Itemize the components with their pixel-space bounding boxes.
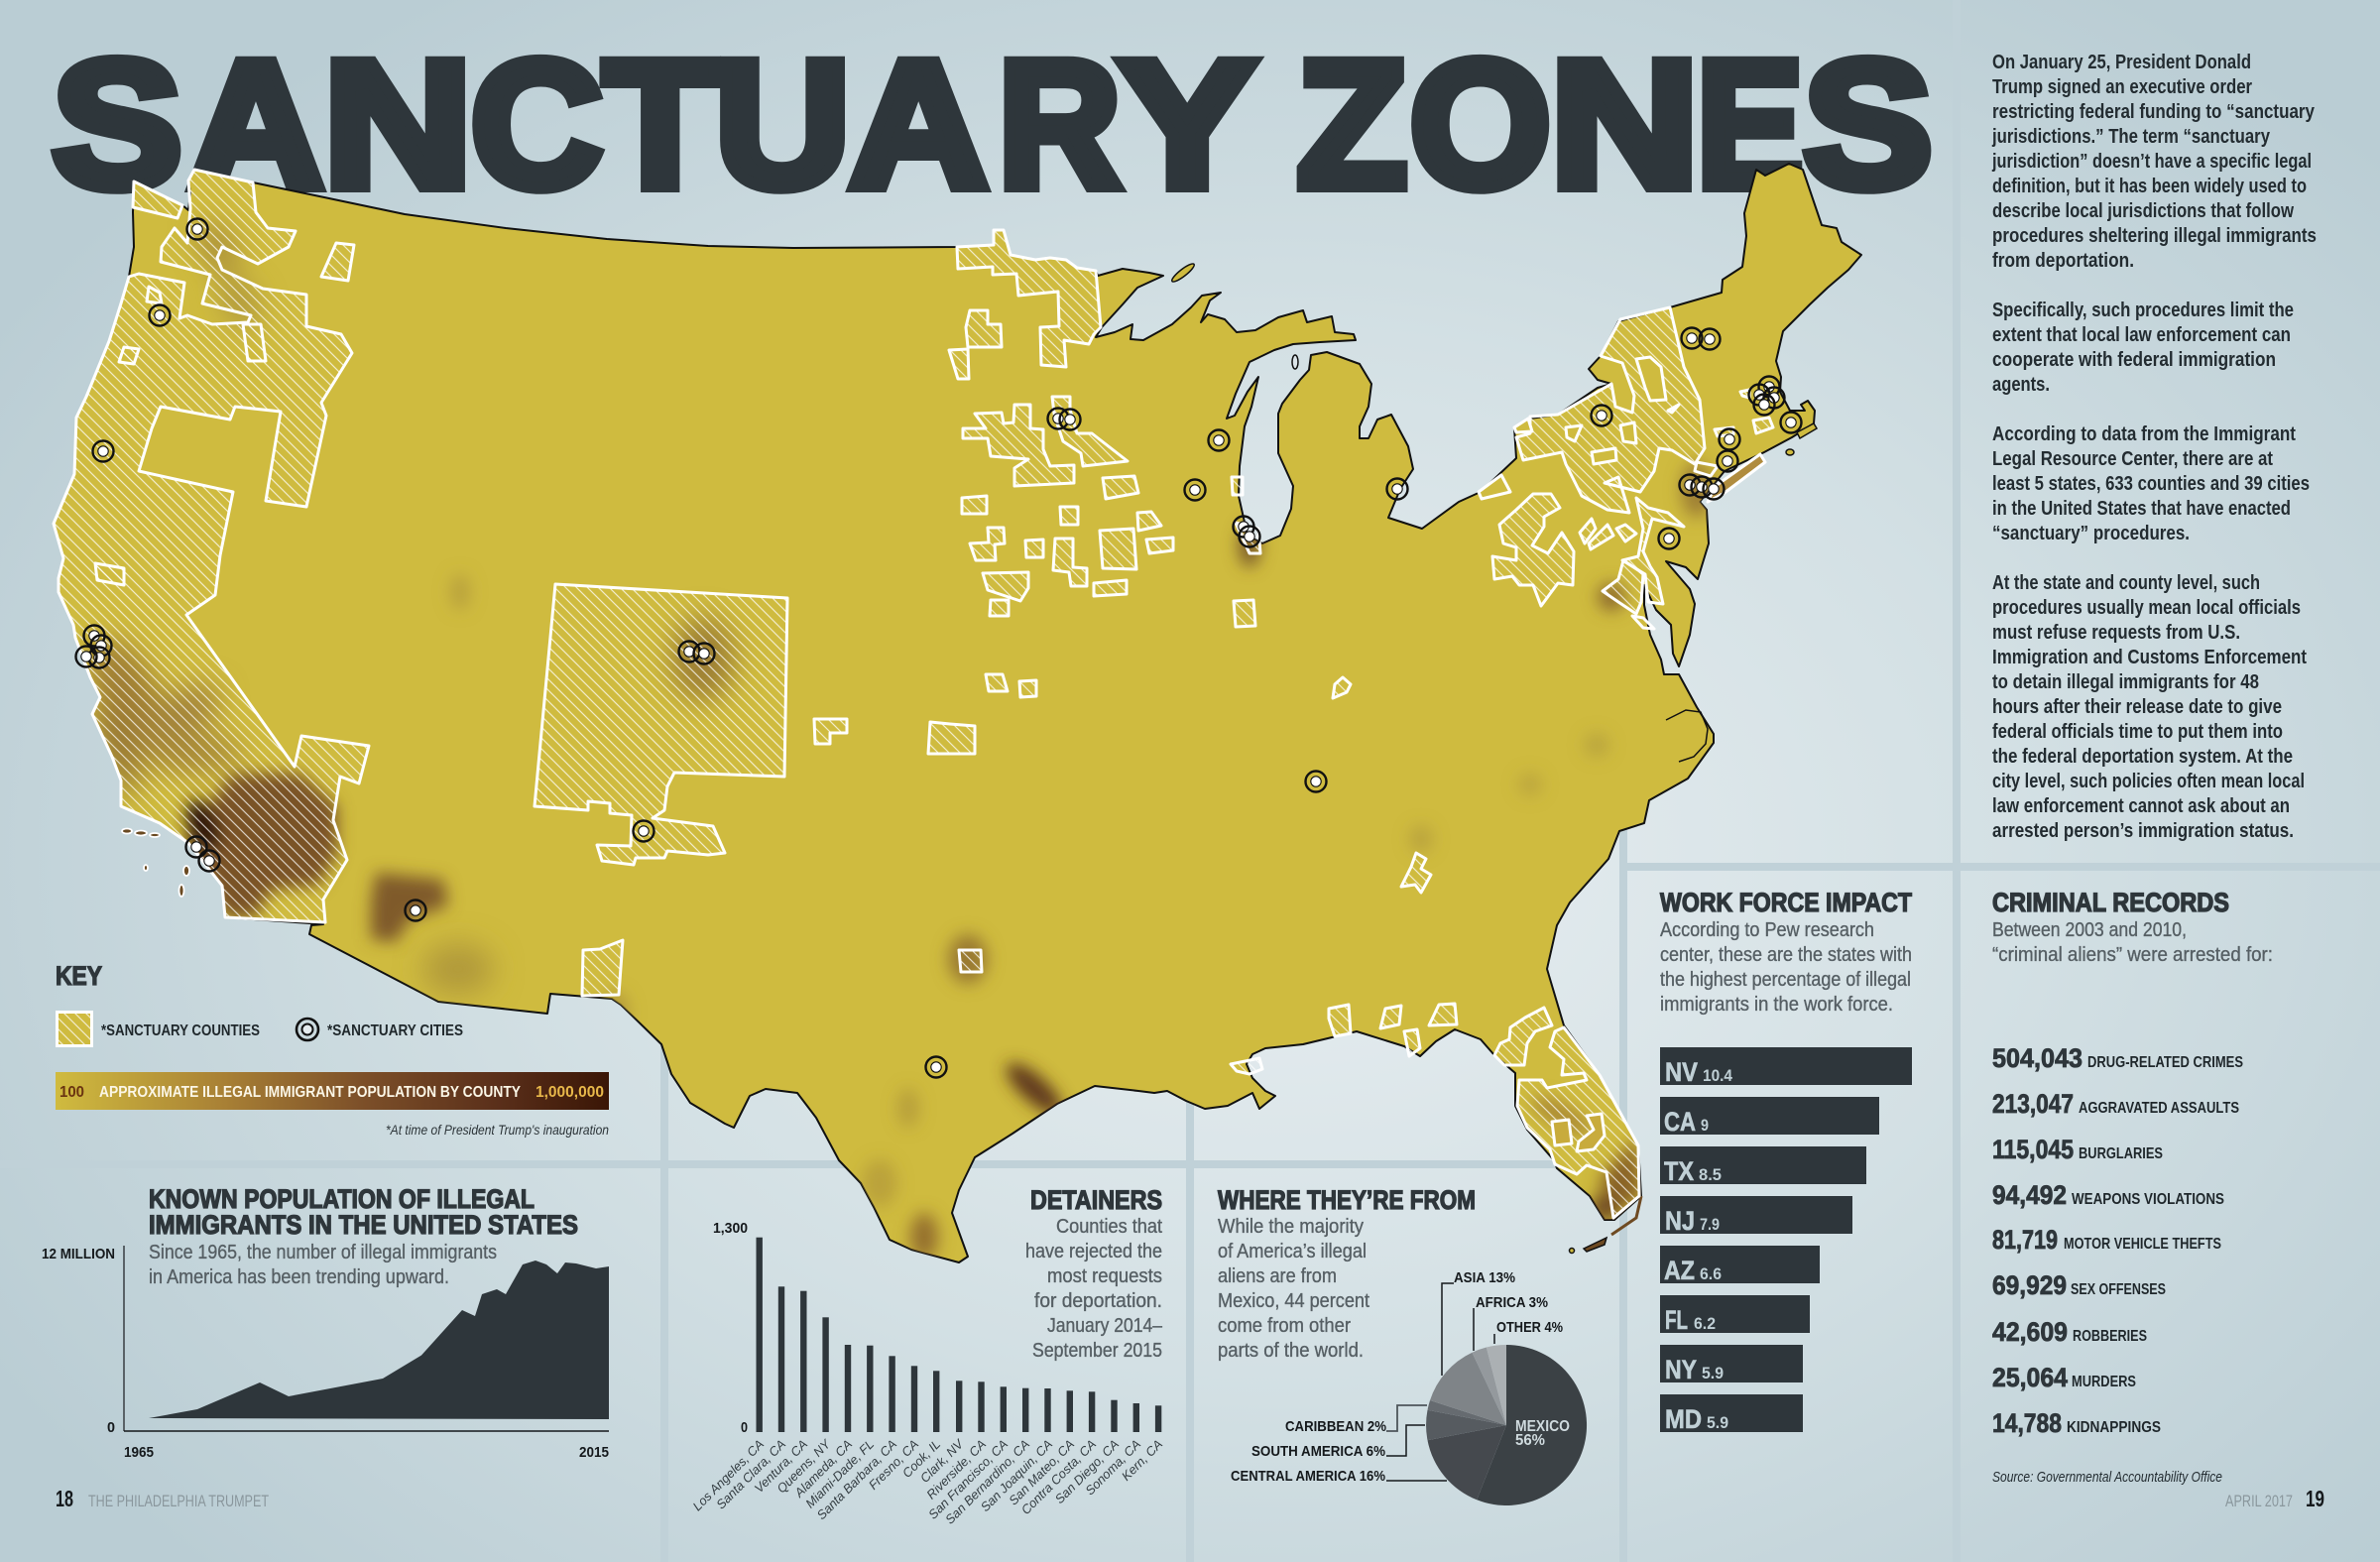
article text column: must refuse requests from U.S. [1992, 622, 2240, 644]
arrest statistics [1992, 1043, 2243, 1438]
population heat layer [74, 214, 1713, 1261]
article text column: restricting federal funding to “sanctuary [1992, 101, 2316, 123]
label: sanctuary counties: *SANCTUARY COUNTIES [101, 1022, 260, 1039]
title: C [471, 23, 603, 225]
intro text: Between 2003 and 2010, [1992, 919, 2187, 941]
bar chart: Miami-Dade, FL [802, 1437, 877, 1510]
arrest statistics: MOTOR VEHICLE THEFTS [2064, 1236, 2221, 1253]
intro text: parts of the world. [1218, 1340, 1364, 1362]
article text column: describe local jurisdictions that follow [1992, 200, 2294, 222]
bar chart: Santa Clara, CA [713, 1437, 788, 1512]
intro text: aliens are from [1218, 1265, 1337, 1287]
land mass [54, 164, 1861, 1262]
horizontal bar chart: 5.9 [1702, 1364, 1724, 1382]
article text column: law enforcement cannot ask about an [1992, 795, 2290, 817]
arrest statistics: 504,043 [1992, 1043, 2082, 1073]
article text column: agents. [1992, 374, 2050, 396]
article text column: to detain illegal immigrants for 48 [1992, 671, 2259, 693]
population gradient legend: 1,000,000 [536, 1084, 604, 1101]
article text column: “sanctuary” procedures. [1992, 523, 2190, 544]
pie chart [1231, 1269, 1587, 1505]
article text column: At the state and county level, such [1992, 572, 2260, 594]
intro text: center, these are the states with [1660, 944, 1912, 966]
intro text: While the majority [1218, 1216, 1364, 1238]
article text column: On January 25, President Donald [1992, 52, 2251, 73]
horizontal bar chart: 5.9 [1707, 1413, 1728, 1432]
panel: known population [42, 1184, 609, 1461]
article text column: procedures usually mean local officials [1992, 597, 2301, 619]
article text column: least 5 states, 633 counties and 39 cities [1992, 473, 2310, 495]
arrest statistics: 81,719 [1992, 1225, 2058, 1255]
bar chart: Cook, IL [899, 1437, 943, 1481]
horizontal bar chart: NV [1665, 1057, 1698, 1087]
article text column: definition, but it has been widely used to [1992, 176, 2307, 197]
sanctuary counties: west coast [54, 170, 369, 922]
intro text [1992, 919, 2273, 966]
area chart: 0 [107, 1419, 115, 1436]
article text column: cooperate with federal immigration [1992, 349, 2276, 371]
article text column: the federal deportation system. At the [1992, 746, 2293, 768]
article text column: arrested person’s immigration status. [1992, 820, 2294, 842]
intro text: come from other [1218, 1315, 1351, 1337]
arrest statistics: 94,492 [1992, 1180, 2067, 1210]
intro text: have rejected the [1025, 1241, 1162, 1262]
title: T [603, 23, 717, 225]
arrest statistics: KIDNAPPINGS [2067, 1419, 2161, 1436]
article text column: According to data from the Immigrant [1992, 423, 2296, 445]
panel: where they're from [1218, 1185, 1587, 1505]
bar chart: San Diego, CA [1052, 1437, 1122, 1506]
horizontal bar chart: FL [1665, 1305, 1688, 1335]
horizontal bar chart: NY [1665, 1355, 1697, 1384]
horizontal bar chart: CA [1664, 1107, 1696, 1137]
bar chart: Contra Costa, CA [1018, 1437, 1099, 1517]
intro text: January 2014– [1047, 1315, 1163, 1337]
horizontal bar chart: 7.9 [1700, 1215, 1720, 1234]
bar chart: Alameda, CA [790, 1437, 855, 1501]
article text column: jurisdictions.” The term “sanctuary [1991, 126, 2271, 148]
title: U [715, 23, 850, 225]
pie chart: AFRICA 3% [1476, 1294, 1548, 1311]
folio right: APRIL 2017 [2225, 1492, 2293, 1510]
bar chart: Riverside, CA [923, 1437, 989, 1502]
intro text: for deportation. [1034, 1290, 1162, 1312]
bar chart: Los Angeles, CA [689, 1437, 767, 1513]
article text column: hours after their release date to give [1992, 696, 2282, 718]
title: N [1550, 23, 1699, 225]
map of the United States [54, 164, 1861, 1262]
article text column: in the United States that have enacted [1992, 498, 2291, 520]
title: A [849, 23, 988, 225]
heading: IMMIGRANTS IN THE UNITED STATES [149, 1210, 578, 1240]
horizontal bar chart: 10.4 [1703, 1066, 1732, 1085]
arrest statistics: ROBBERIES [2073, 1328, 2147, 1345]
pie chart: 56% [1515, 1432, 1545, 1449]
bar chart: San Francisco, CA [925, 1437, 1011, 1522]
arrest statistics: 69,929 [1992, 1270, 2067, 1300]
bar chart: San Mateo, CA [1006, 1437, 1077, 1507]
sanctuary counties: southwest and plains [535, 584, 982, 996]
intro text: Counties that [1056, 1216, 1162, 1238]
label: sanctuary cities: *SANCTUARY CITIES [327, 1022, 463, 1039]
bar chart [689, 1220, 1165, 1527]
title: R [999, 23, 1121, 225]
swatch: sanctuary counties [58, 1012, 91, 1045]
key heading: KEY [56, 961, 102, 991]
pie chart: CARIBBEAN 2% [1285, 1418, 1386, 1435]
area chart: 2015 [579, 1444, 609, 1461]
bar chart: 1,300 [713, 1220, 748, 1237]
arrest statistics: 14,788 [1992, 1408, 2062, 1438]
heading [149, 1184, 578, 1240]
intro text: of America’s illegal [1218, 1241, 1367, 1262]
article text column: jurisdiction” doesn’t have a specific legal [1991, 151, 2312, 173]
sanctuary counties: gulf and florida [1231, 1004, 1639, 1218]
article text column: Immigration and Customs Enforcement [1992, 647, 2307, 668]
heading: CRIMINAL RECORDS [1992, 888, 2229, 917]
bar chart: Kern, CA [1119, 1437, 1165, 1484]
sanctuary counties: upper midwest [949, 230, 1431, 893]
arrest statistics: DRUG-RELATED CRIMES [2087, 1054, 2243, 1071]
article text column [1991, 52, 2317, 842]
bar chart: Ventura, CA [752, 1437, 810, 1496]
pie chart: ASIA 13% [1454, 1269, 1515, 1286]
article text column: city level, such policies often mean local [1992, 771, 2305, 792]
panel: work force impact [1660, 888, 1912, 1434]
arrest statistics: 42,609 [1992, 1317, 2068, 1347]
horizontal bar chart [1660, 1047, 1912, 1434]
article text column: Legal Resource Center, there are at [1992, 448, 2273, 470]
horizontal bar chart: TX [1664, 1156, 1694, 1186]
sanctuary counties: northeast [1479, 307, 1773, 629]
population gradient legend: APPROXIMATE ILLEGAL IMMIGRANT POPULATION BY COUNTY [99, 1084, 521, 1101]
intro text: “criminal aliens” were arrested for: [1992, 944, 2273, 966]
intro text: Since 1965, the number of illegal immigrants [149, 1242, 497, 1263]
area chart: 1965 [124, 1444, 154, 1461]
article text column: Trump signed an executive order [1992, 76, 2252, 98]
intro text [1218, 1216, 1369, 1362]
heading: WHERE THEY’RE FROM [1218, 1185, 1476, 1215]
pie chart: SOUTH AMERICA 6% [1251, 1443, 1385, 1460]
title: A [188, 23, 323, 225]
icon: sanctuary city [297, 1019, 318, 1040]
arrest statistics: MURDERS [2072, 1374, 2136, 1390]
key [56, 961, 609, 1138]
islands and water details [1170, 262, 1817, 1254]
horizontal bar chart: 6.6 [1700, 1264, 1722, 1283]
intro text: immigrants in the work force. [1660, 994, 1893, 1016]
long island [1708, 454, 1765, 502]
intro text [1660, 919, 1912, 1016]
bar chart: Fresno, CA [866, 1437, 921, 1493]
arrest statistics: 213,047 [1992, 1089, 2074, 1119]
intro text: According to Pew research [1660, 919, 1874, 941]
population gradient legend: 100 [60, 1084, 84, 1101]
article text column: procedures sheltering illegal immigrants [1992, 225, 2317, 247]
bar chart: Clark, NV [917, 1435, 967, 1486]
horizontal bar chart: MD [1665, 1404, 1702, 1434]
folio right [2225, 1486, 2324, 1511]
sanctuary cities [75, 218, 1801, 1077]
intro text: Mexico, 44 percent [1218, 1290, 1369, 1312]
folio left [56, 1486, 269, 1511]
bar chart: Sonoma, CA [1082, 1437, 1143, 1498]
article text column: from deportation. [1992, 250, 2134, 272]
article text column: federal officials time to put them into [1992, 721, 2283, 743]
bar chart: Santa Barbara, CA [814, 1437, 899, 1522]
arrest statistics: SEX OFFENSES [2071, 1281, 2166, 1298]
key footnote: *At time of President Trump's inauguration [386, 1122, 609, 1138]
article text column: extent that local law enforcement can [1992, 324, 2291, 346]
pie chart: MEXICO [1515, 1418, 1570, 1435]
bar chart: 0 [741, 1419, 748, 1436]
horizontal bar chart: 8.5 [1699, 1165, 1722, 1184]
title: Z [1297, 23, 1407, 225]
horizontal bar chart: 9 [1701, 1116, 1709, 1135]
area chart: 12 MILLION [42, 1246, 115, 1262]
title: S [53, 23, 182, 225]
panel: criminal records [1992, 888, 2273, 1486]
folio left: THE PHILADELPHIA TRUMPET [88, 1492, 269, 1510]
intro text: September 2015 [1032, 1340, 1162, 1362]
california islands [122, 829, 189, 897]
pie chart: OTHER 4% [1496, 1319, 1563, 1336]
pie chart: CENTRAL AMERICA 16% [1231, 1468, 1385, 1485]
arrest statistics: 25,064 [1992, 1363, 2068, 1392]
arrest statistics: WEAPONS VIOLATIONS [2072, 1191, 2224, 1208]
arrest statistics: AGGRAVATED ASSAULTS [2079, 1100, 2239, 1117]
title: O [1410, 23, 1551, 225]
panel: detainers [689, 1185, 1165, 1527]
intro text: most requests [1047, 1265, 1162, 1287]
intro text: in America has been trending upward. [149, 1266, 449, 1288]
horizontal bar chart: NJ [1665, 1206, 1695, 1236]
title: S [1804, 23, 1933, 225]
horizontal bar chart: AZ [1664, 1256, 1695, 1285]
horizontal bar chart: 6.2 [1694, 1314, 1716, 1333]
population gradient legend [56, 1072, 609, 1110]
area chart [42, 1246, 609, 1461]
folio left: 18 [56, 1486, 73, 1511]
folio right: 19 [2306, 1486, 2324, 1511]
source note: Source: Governmental Accountability Office [1992, 1470, 2222, 1486]
heading: DETAINERS [1030, 1185, 1162, 1215]
bar chart: San Bernardino, CA [942, 1437, 1032, 1527]
intro text: the highest percentage of illegal [1660, 969, 1911, 991]
heading: WORK FORCE IMPACT [1660, 888, 1912, 917]
heading: KNOWN POPULATION OF ILLEGAL [149, 1184, 535, 1214]
intro text [149, 1242, 497, 1288]
arrest statistics: BURGLARIES [2079, 1145, 2163, 1162]
arrest statistics: 115,045 [1992, 1135, 2074, 1164]
bar chart: San Joaquin, CA [978, 1437, 1055, 1514]
bar chart: Queens, NY [774, 1435, 834, 1496]
title: E [1697, 23, 1803, 225]
title: Y [1119, 23, 1256, 225]
intro text [1025, 1216, 1163, 1362]
article text column: Specifically, such procedures limit the [1992, 300, 2294, 321]
title: N [323, 23, 472, 225]
